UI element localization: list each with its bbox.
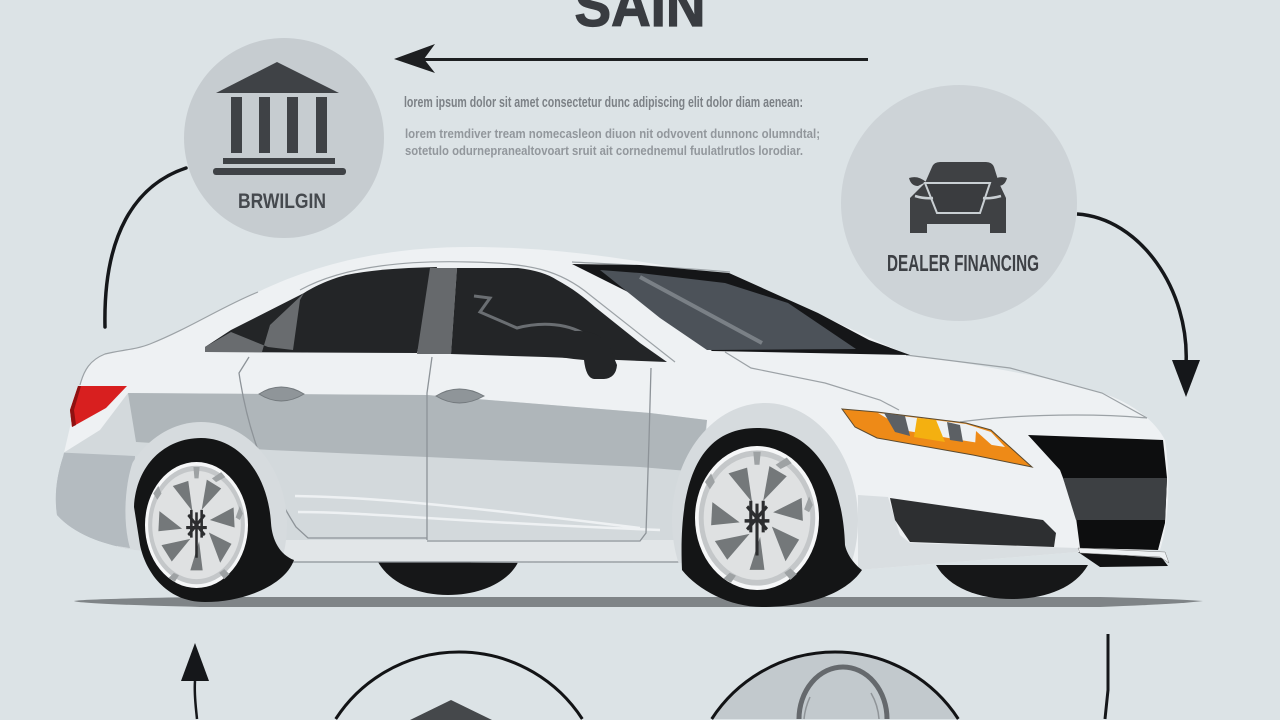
- rear side window: [205, 267, 437, 353]
- bank label: BRWILGIN: [238, 190, 326, 213]
- icon: house roof: [410, 700, 492, 720]
- panel: bottom-left circle: [336, 652, 582, 720]
- rear bumper repaint: [56, 456, 135, 548]
- rear rim: [145, 462, 248, 588]
- window seat highlight: [474, 296, 590, 338]
- rear fender ring: [117, 422, 286, 553]
- arrow: right curved down: [1077, 214, 1200, 397]
- car: [50, 247, 1169, 637]
- rear tyre: [134, 438, 294, 602]
- text block: description: lorem ipsum dolor sit amet consectetur dunc adipiscing elit dolor diam aenean:: [404, 94, 803, 111]
- tail light: [70, 386, 127, 427]
- side shading: [56, 393, 1078, 570]
- headlight: [842, 409, 1032, 467]
- icon: bank: [213, 62, 346, 175]
- door handles: [259, 387, 484, 403]
- front grille: [1028, 435, 1167, 550]
- lower air vent: [890, 498, 1056, 547]
- far wheels: [377, 560, 1088, 599]
- front side window: [451, 268, 667, 362]
- text block: description: sotetulo odurnepranealtovoart sruit ait cornednemul fuulatlrutlos lorodiar.: [405, 143, 803, 158]
- text block: description: lorem tremdiver tream nomecasleon diuon nit odvovent dunnonc olumndtal;: [405, 126, 820, 141]
- arrow: bottom-right line: [1105, 634, 1108, 719]
- text block: description: [404, 94, 820, 158]
- panel: bank circle: [184, 38, 384, 238]
- front fender ring: [674, 403, 858, 563]
- pillar: [417, 268, 457, 354]
- panel: bottom-right circle: [712, 652, 958, 719]
- side mirror: [540, 331, 617, 379]
- front tyre: [682, 428, 862, 607]
- front rim: [695, 446, 819, 590]
- door lines: [239, 357, 680, 562]
- arrow: bottom-left upward: [181, 643, 209, 719]
- windshield: [572, 264, 910, 355]
- dealer label: DEALER FINANCING: [887, 250, 1039, 276]
- body outline highlights: [80, 262, 1147, 422]
- arrow: top leftward: [394, 44, 868, 73]
- ground shadow: [74, 597, 1203, 607]
- icon: magnifier ring: [799, 667, 887, 719]
- rear window reflections: [205, 293, 304, 352]
- icon: car front: [909, 162, 1007, 233]
- bumper lip: [1078, 548, 1169, 567]
- car body: [56, 247, 1168, 570]
- arrow: left curved up to bank: [105, 168, 186, 327]
- panel: dealer financing circle: [841, 85, 1077, 321]
